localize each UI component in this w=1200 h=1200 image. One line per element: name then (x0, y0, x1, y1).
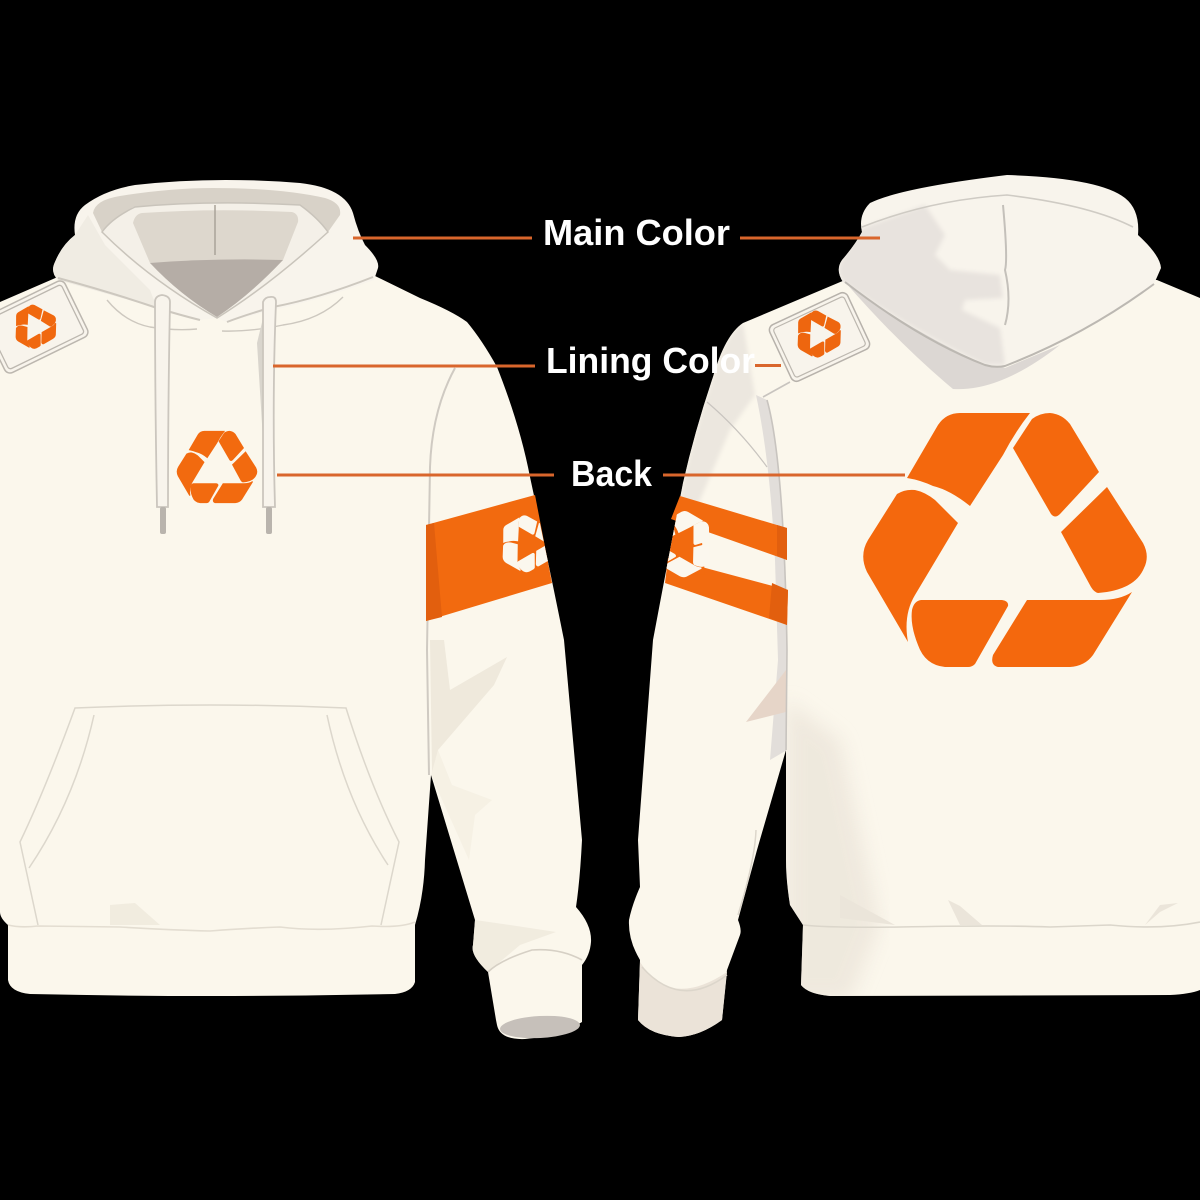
armband stripe (426, 495, 552, 621)
leader left (277, 474, 554, 476)
back cuff seam (642, 830, 756, 991)
logo orange centre (666, 520, 704, 570)
collar band (102, 203, 328, 318)
right cord (263, 297, 276, 507)
left aglet (160, 507, 166, 534)
front body and sleeve (0, 276, 591, 1039)
leader right (755, 364, 781, 367)
back sleeve stripes (665, 496, 788, 625)
left cord (155, 295, 170, 507)
back hem seam (803, 922, 1200, 927)
back body and sleeve (629, 280, 1200, 1037)
right cord shadow (257, 310, 266, 440)
pocket (20, 705, 399, 925)
large back logo (863, 413, 1147, 667)
back hood shading (839, 205, 1005, 365)
front hoodie (0, 180, 591, 1040)
back hoodie (629, 175, 1200, 1037)
inner panel (133, 210, 298, 317)
callout: back (277, 453, 905, 494)
patch base (0, 279, 90, 375)
back patch stitching (773, 296, 866, 378)
lower body shade (786, 700, 880, 1000)
armband logo (502, 515, 548, 572)
back armhole lines (707, 382, 790, 750)
inner centre seam (214, 205, 216, 255)
leader left (273, 364, 535, 368)
upper stripe (671, 496, 787, 560)
back hood (839, 175, 1161, 367)
right drawstring (257, 297, 276, 534)
hem folds (840, 895, 1178, 925)
leader right (740, 236, 880, 240)
left drawstring (155, 295, 170, 534)
hood ridge (862, 195, 1133, 227)
lower stripe (665, 558, 788, 625)
sleeve fold shadows (110, 640, 556, 972)
stripe dark ends (769, 525, 788, 625)
cuff opening (499, 1014, 581, 1040)
logo white segments (666, 511, 710, 578)
hood outer (53, 180, 378, 322)
underarm wedge (746, 670, 786, 722)
back patch logo (787, 304, 849, 363)
leader right (663, 474, 905, 476)
sleeve seam (427, 368, 455, 775)
label lining color: Lining Color (546, 340, 755, 381)
cuff (488, 950, 582, 1040)
hood lower edge (845, 282, 1154, 367)
hood centre seam (1003, 205, 1008, 325)
back patch base (767, 291, 872, 383)
upper sleeve shading (674, 323, 754, 528)
front armband (426, 495, 564, 621)
callout: main color (353, 212, 880, 253)
leader left (353, 236, 532, 240)
front chest logo (177, 431, 257, 503)
inner dark (150, 259, 283, 317)
under hood shadow (845, 282, 1060, 389)
back hood shape (839, 175, 1161, 367)
hood (53, 180, 378, 331)
hood lining (93, 188, 340, 232)
back soft shading (638, 323, 1178, 1037)
back shoulder patch (767, 291, 872, 383)
hood lower lines (58, 277, 373, 331)
front shoulder patch (0, 279, 90, 375)
patch stitching (0, 284, 85, 370)
sleeve armhole shadow (756, 395, 787, 760)
hem seam (8, 922, 415, 931)
label back: Back (571, 453, 653, 494)
callout: lining color (273, 340, 781, 381)
cuff shade (638, 962, 727, 1037)
patch logo (6, 298, 63, 354)
hood shading (53, 215, 157, 308)
label main color: Main Color (543, 212, 730, 253)
back sleeve logo (666, 511, 710, 578)
armband dark edge (426, 523, 442, 621)
cuff seam (488, 950, 582, 972)
right aglet (266, 507, 272, 534)
